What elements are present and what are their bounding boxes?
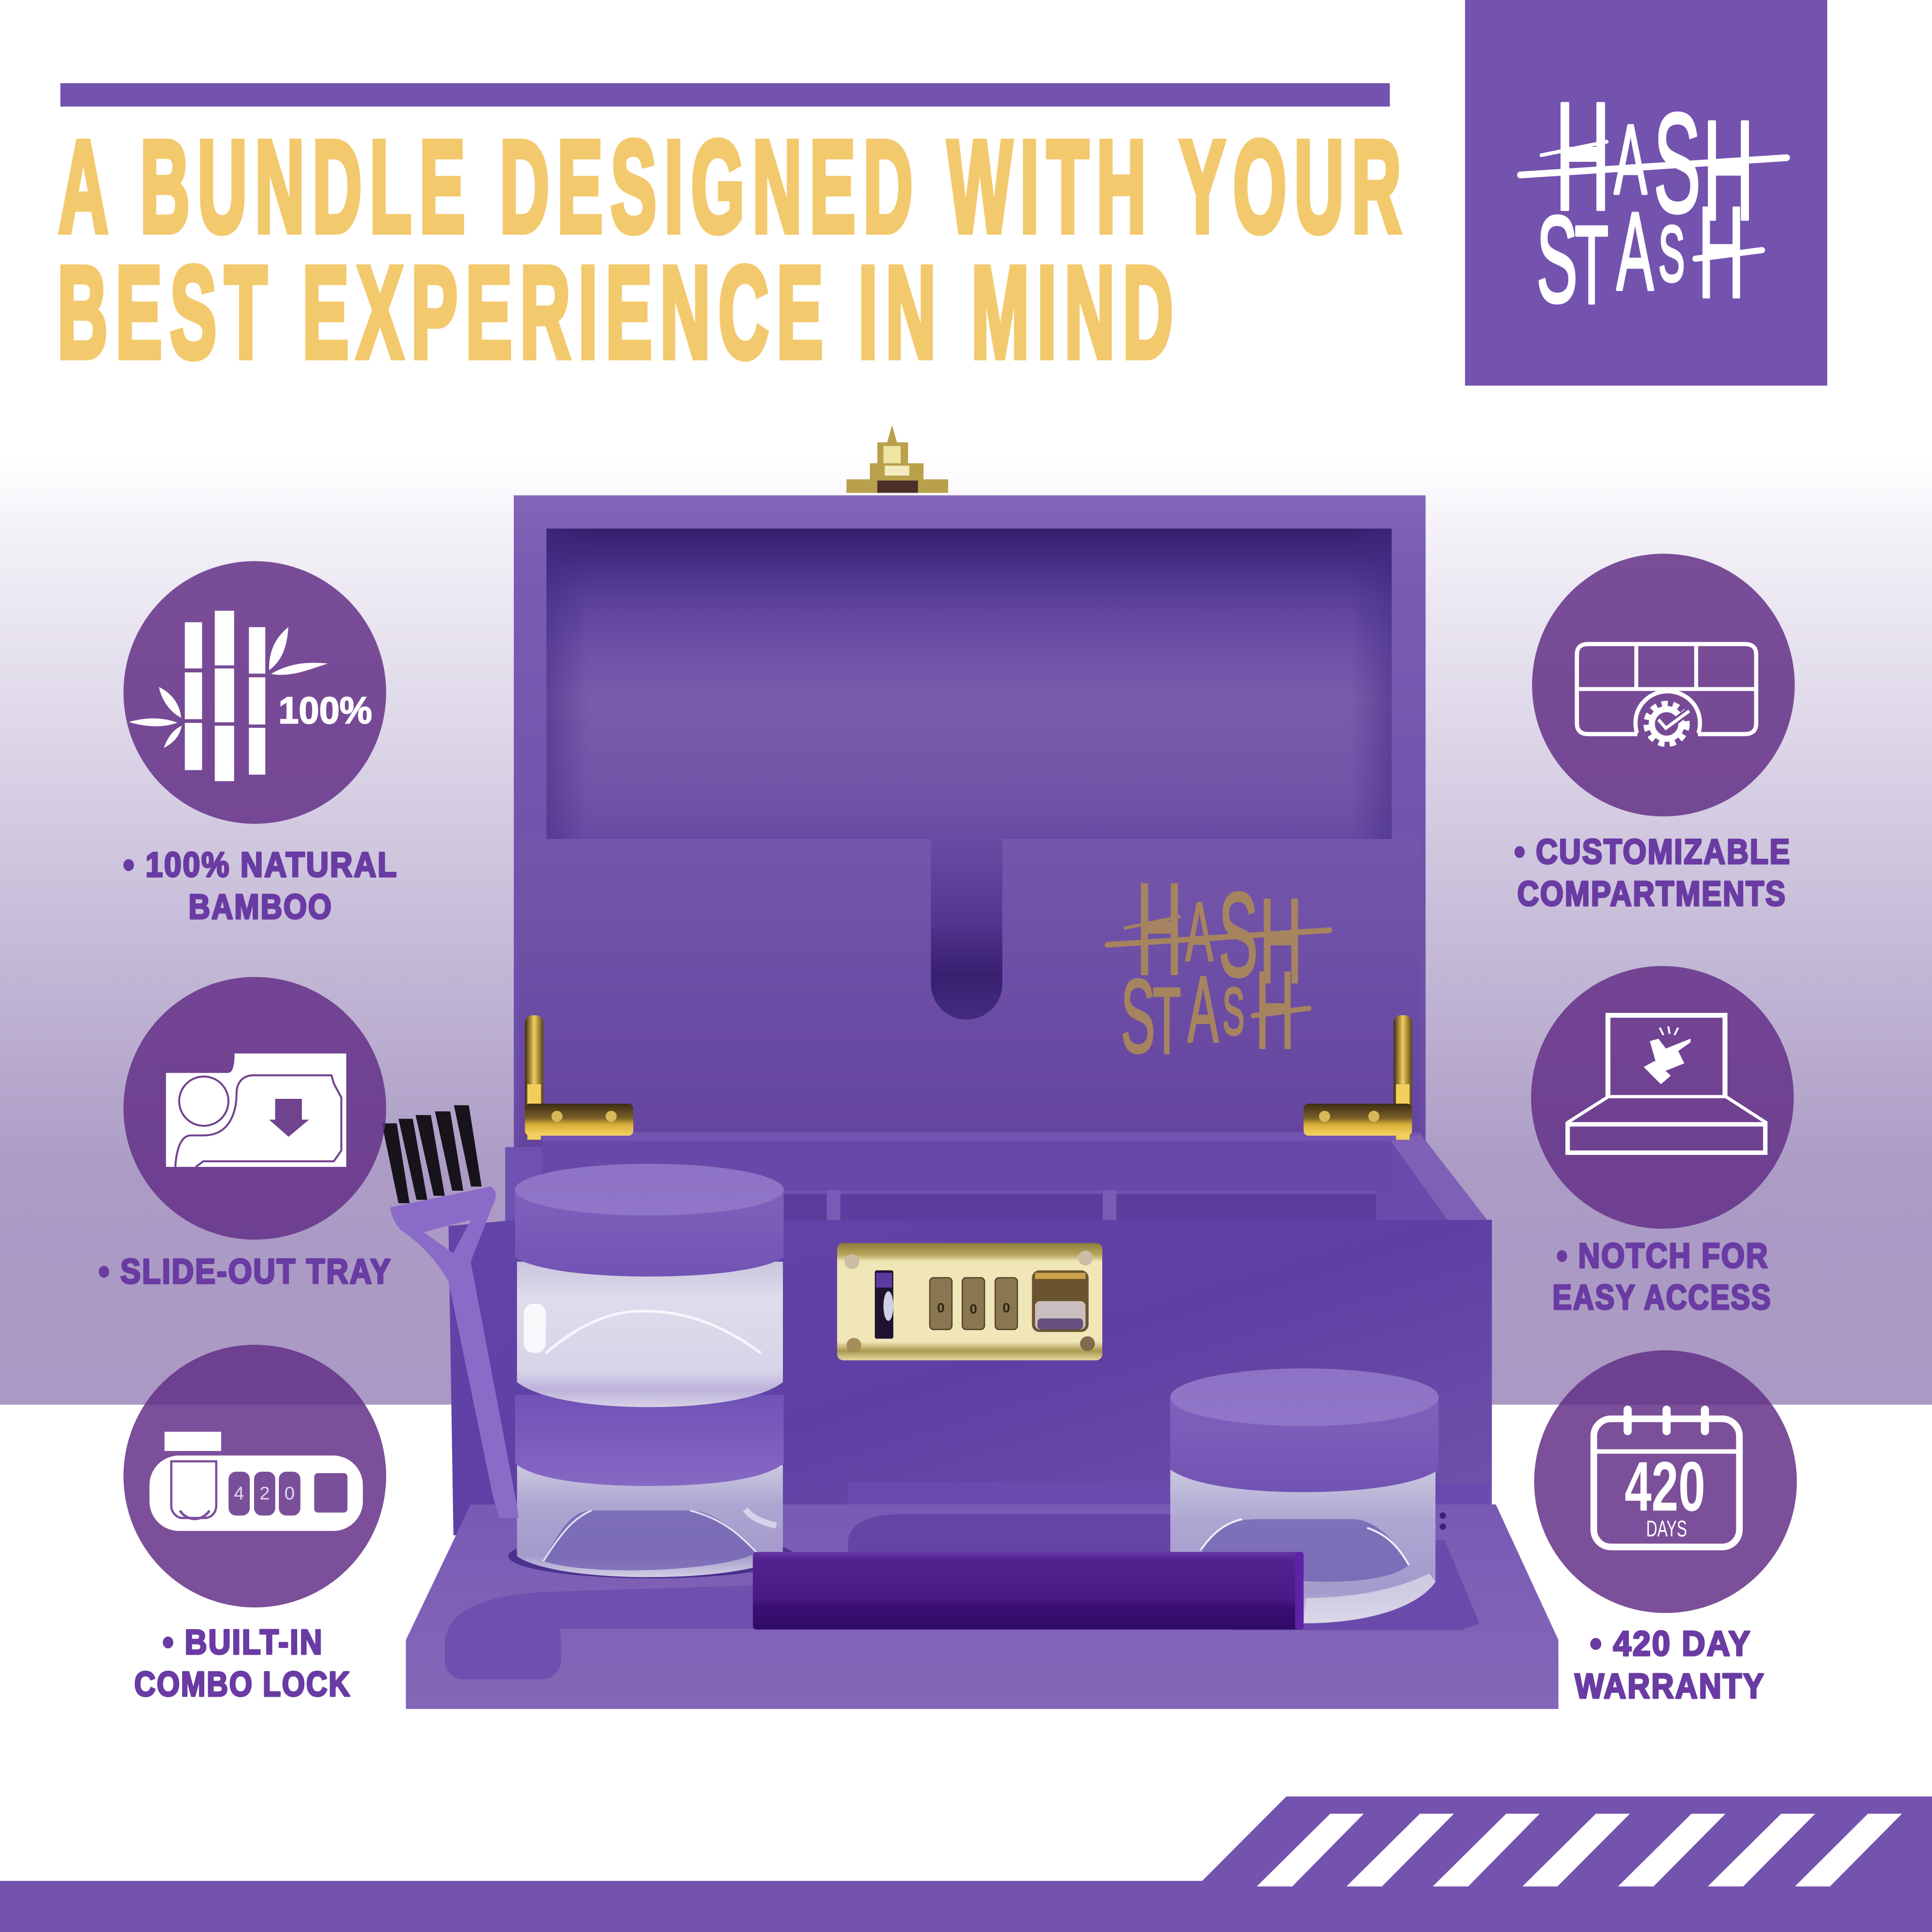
label: COMBO LOCK: [134, 1664, 351, 1704]
notch badge circle: [1531, 966, 1794, 1229]
footer band with slanted stripes: [0, 1796, 1932, 1932]
small jar: [1170, 1368, 1439, 1623]
lid recess: [546, 528, 1392, 839]
label: • SLIDE-OUT TRAY: [99, 1252, 392, 1291]
label: • CUSTOMIZABLE: [1514, 832, 1791, 871]
insert panel: [519, 839, 1421, 1149]
icon: lock: 2: [259, 1483, 270, 1504]
gold logo on panel: S: [1121, 958, 1155, 1075]
logo panel: S: [1536, 190, 1577, 328]
label: • 100% NATURAL: [123, 845, 398, 884]
label: COMPARTMENTS: [1517, 874, 1787, 913]
bamboo badge circle: [124, 561, 386, 824]
gold logo on panel: A: [1186, 885, 1213, 978]
right hinge: [1304, 1015, 1412, 1140]
logo panel: A: [1614, 105, 1647, 215]
icon: bamboo: 100%: [279, 690, 372, 731]
top lid: [515, 1189, 783, 1277]
icon: lock: 4: [234, 1483, 244, 1504]
combination lock: 0: [1003, 1300, 1010, 1315]
purple storage tube: [753, 1552, 1304, 1630]
feature: 420 day warranty: [1534, 1350, 1797, 1705]
combination lock: 0: [970, 1301, 977, 1316]
gold logo on panel: T: [1153, 969, 1181, 1073]
box interior: [505, 1132, 1492, 1226]
logo panel: S: [1653, 84, 1701, 242]
icon: lock: 0: [284, 1483, 295, 1504]
logo panel: H: [1703, 92, 1754, 250]
cleaning brush: [382, 1105, 519, 1518]
header accent bar: [60, 83, 1390, 107]
label: EASY ACCESS: [1552, 1278, 1772, 1317]
middle lid: [515, 1395, 783, 1486]
label: • NOTCH FOR: [1557, 1236, 1769, 1275]
icon: calendar: DAYS: [1646, 1516, 1687, 1542]
logo panel: T: [1575, 203, 1608, 327]
lower glass jar: [517, 1465, 783, 1577]
product: open bamboo box: [382, 425, 1559, 1709]
finger notch: [931, 839, 1002, 1020]
large jar stack: [508, 1164, 796, 1578]
label: [134, 1623, 351, 1704]
icon: lock: [149, 1432, 363, 1531]
logo panel: H: [1698, 180, 1745, 325]
logo panel: [1465, 0, 1827, 385]
feature: notch for easy access: [1531, 966, 1794, 1317]
icon: calendar: 420: [1625, 1447, 1705, 1526]
compartments badge circle: [1532, 554, 1795, 816]
icon: compartments with gear: [1577, 644, 1756, 744]
label: [1514, 832, 1791, 913]
label: BAMBOO: [188, 887, 333, 926]
logo panel: A: [1617, 190, 1654, 313]
combination lock: 0: [937, 1300, 945, 1315]
logo panel: H: [1555, 71, 1611, 242]
clasp on lid: [847, 425, 948, 493]
label: • BUILT-IN: [163, 1623, 324, 1662]
warranty badge circle: [1534, 1350, 1797, 1613]
box front face: [449, 1220, 1492, 1535]
title: [57, 114, 1409, 385]
label: • 420 DAY: [1590, 1624, 1751, 1663]
feature: customizable compartments: [1514, 554, 1795, 913]
label: [1575, 1624, 1765, 1705]
gradient background band: [0, 458, 1932, 1405]
label: [123, 845, 398, 926]
left hinge: [525, 1015, 633, 1140]
tray badge circle: [124, 977, 386, 1240]
logo panel: S: [1659, 210, 1685, 298]
tray hole: [508, 1534, 796, 1578]
upper glass jar: [517, 1262, 783, 1407]
back rail of tray: [848, 1482, 1489, 1507]
lid frame: [514, 496, 1426, 1149]
label: WARRANTY: [1575, 1666, 1765, 1705]
icon: calendar: [1594, 1406, 1739, 1547]
gold logo on panel: H: [1136, 857, 1183, 1002]
gold logo on panel: A: [1188, 958, 1219, 1062]
gold logo on panel: H: [1255, 949, 1294, 1071]
icon: bamboo: [129, 611, 372, 781]
gold logo on panel: S: [1219, 868, 1258, 1002]
label: [1552, 1236, 1772, 1317]
lock badge circle: [124, 1345, 386, 1607]
gold logo on panel: S: [1222, 975, 1245, 1049]
gold logo on panel: [1108, 857, 1329, 1075]
gold logo on panel: H: [1260, 874, 1302, 1008]
feature: slide-out tray: [99, 977, 392, 1291]
slide-out tray: [406, 1505, 1559, 1709]
feature: combo lock: [124, 1345, 386, 1704]
icon: tray: [166, 1053, 346, 1167]
feature: bamboo: [123, 561, 398, 926]
icon: open box with pointing hand: [1567, 1015, 1767, 1152]
combination lock: [837, 1243, 1102, 1360]
